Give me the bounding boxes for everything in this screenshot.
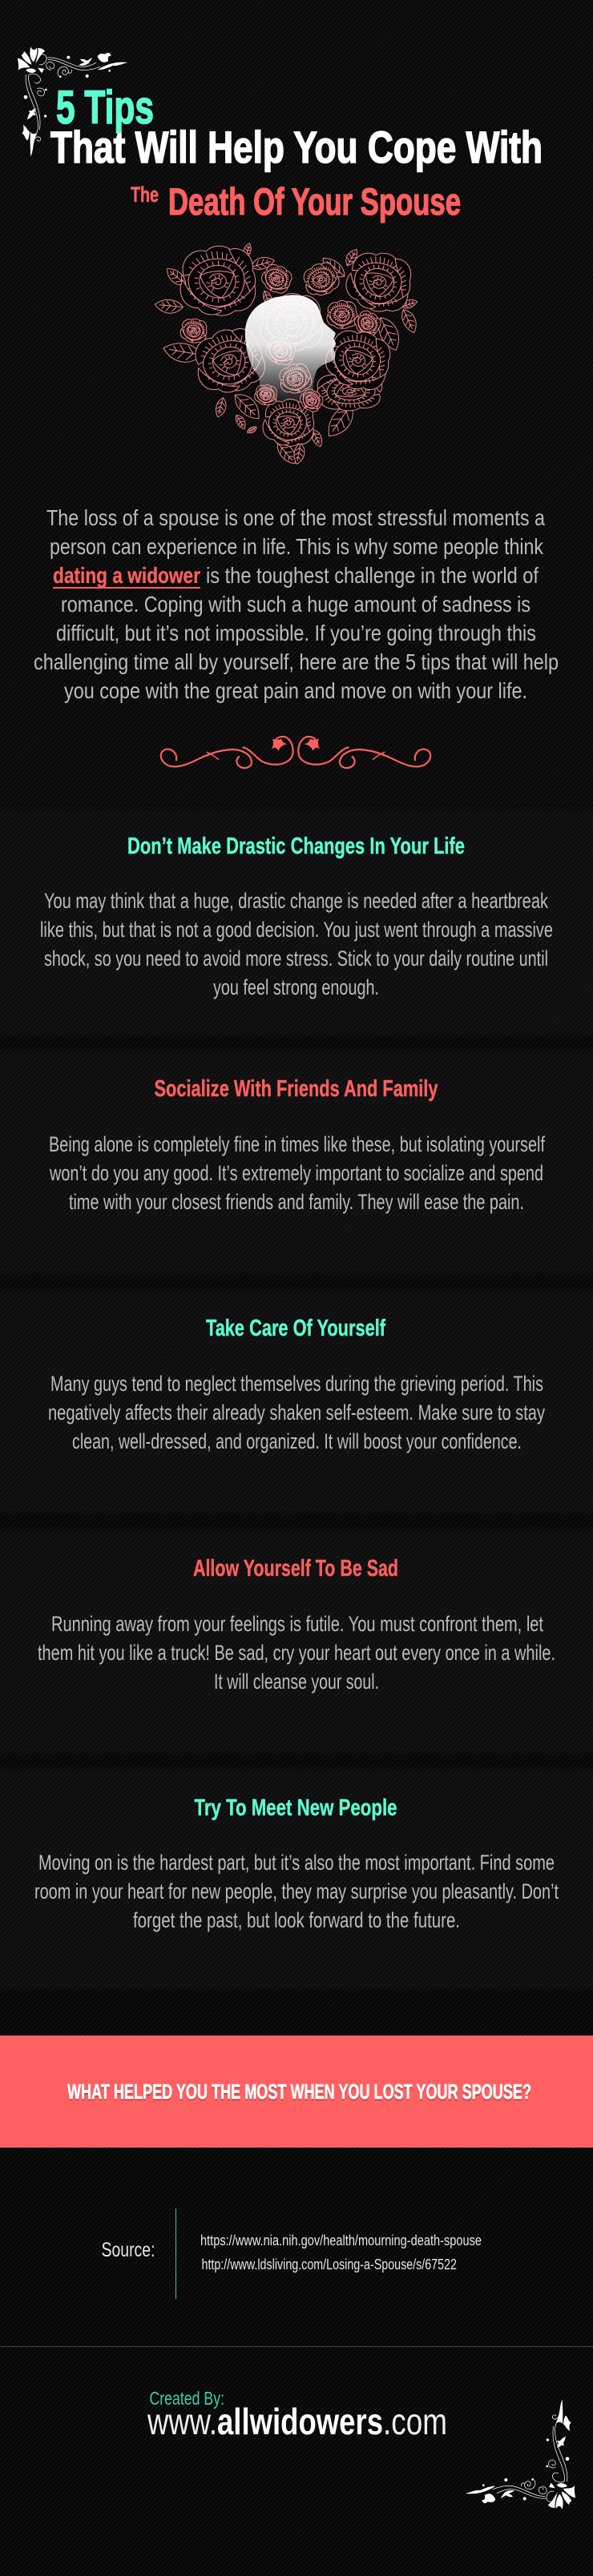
body: tip 2 (49, 1132, 545, 1214)
body: tip 1: you feel strong enough. (213, 975, 379, 999)
panel: tip 5 (0, 1764, 593, 1992)
title line: 5 Tips: 5 Tips (56, 82, 154, 134)
website url (147, 2401, 447, 2442)
website url: allwidowers (217, 2401, 383, 2442)
heading: tip 1: Don’t Make Drastic Changes In Your Life (127, 834, 465, 859)
title word: The: The (131, 183, 159, 207)
heading: tip 4: Allow Yourself To Be Sad (193, 1556, 398, 1581)
intro paragraph (34, 505, 559, 703)
source url 1: https://www.nia.nih.gov/health/mourning-death-spouse (200, 2232, 482, 2248)
source url 2: http://www.ldsliving.com/Losing-a-Spouse/s/67522 (202, 2257, 457, 2273)
source label: Source: (101, 2239, 155, 2261)
decorative flourish divider (161, 737, 430, 768)
panel: tip 3 (0, 1285, 593, 1517)
website url: .com (383, 2401, 447, 2442)
panel: tip 4 (0, 1525, 593, 1757)
credit block (147, 2388, 447, 2442)
body: tip 1 (40, 889, 553, 999)
sources block (101, 2208, 482, 2299)
footer background region (0, 2148, 593, 2576)
body: tip 5 (34, 1851, 559, 1932)
top background region (0, 0, 593, 804)
corner ornament: bottom right (466, 2399, 575, 2510)
created by label: Created By: (149, 2388, 224, 2409)
link: dating a widower: dating a widower (53, 563, 200, 588)
body: tip 3 (48, 1372, 545, 1453)
panel: tip 1 (0, 804, 593, 1039)
corner ornament: top left (18, 46, 127, 157)
panel: tip 2 (0, 1046, 593, 1277)
body: tip 4 (38, 1612, 555, 1694)
heading: tip 5: Try To Meet New People (194, 1795, 397, 1821)
title (50, 82, 543, 223)
heading: tip 2: Socialize With Friends And Family (154, 1076, 438, 1102)
head silhouette (245, 295, 336, 403)
intro paragraph: is the toughest challenge in the world of (206, 563, 539, 588)
website url: www. (147, 2401, 217, 2442)
body: tip 5: forget the past, but look forward to the future. (133, 1908, 460, 1932)
title line: Death Of Your Spouse: Death Of Your Spouse (168, 180, 461, 223)
illustration: rose heart with head silhouette (155, 243, 420, 467)
call to action band (0, 2035, 593, 2148)
heading: tip 3: Take Care Of Yourself (206, 1316, 385, 1341)
body: tip 4: It will cleanse your soul. (214, 1670, 379, 1694)
